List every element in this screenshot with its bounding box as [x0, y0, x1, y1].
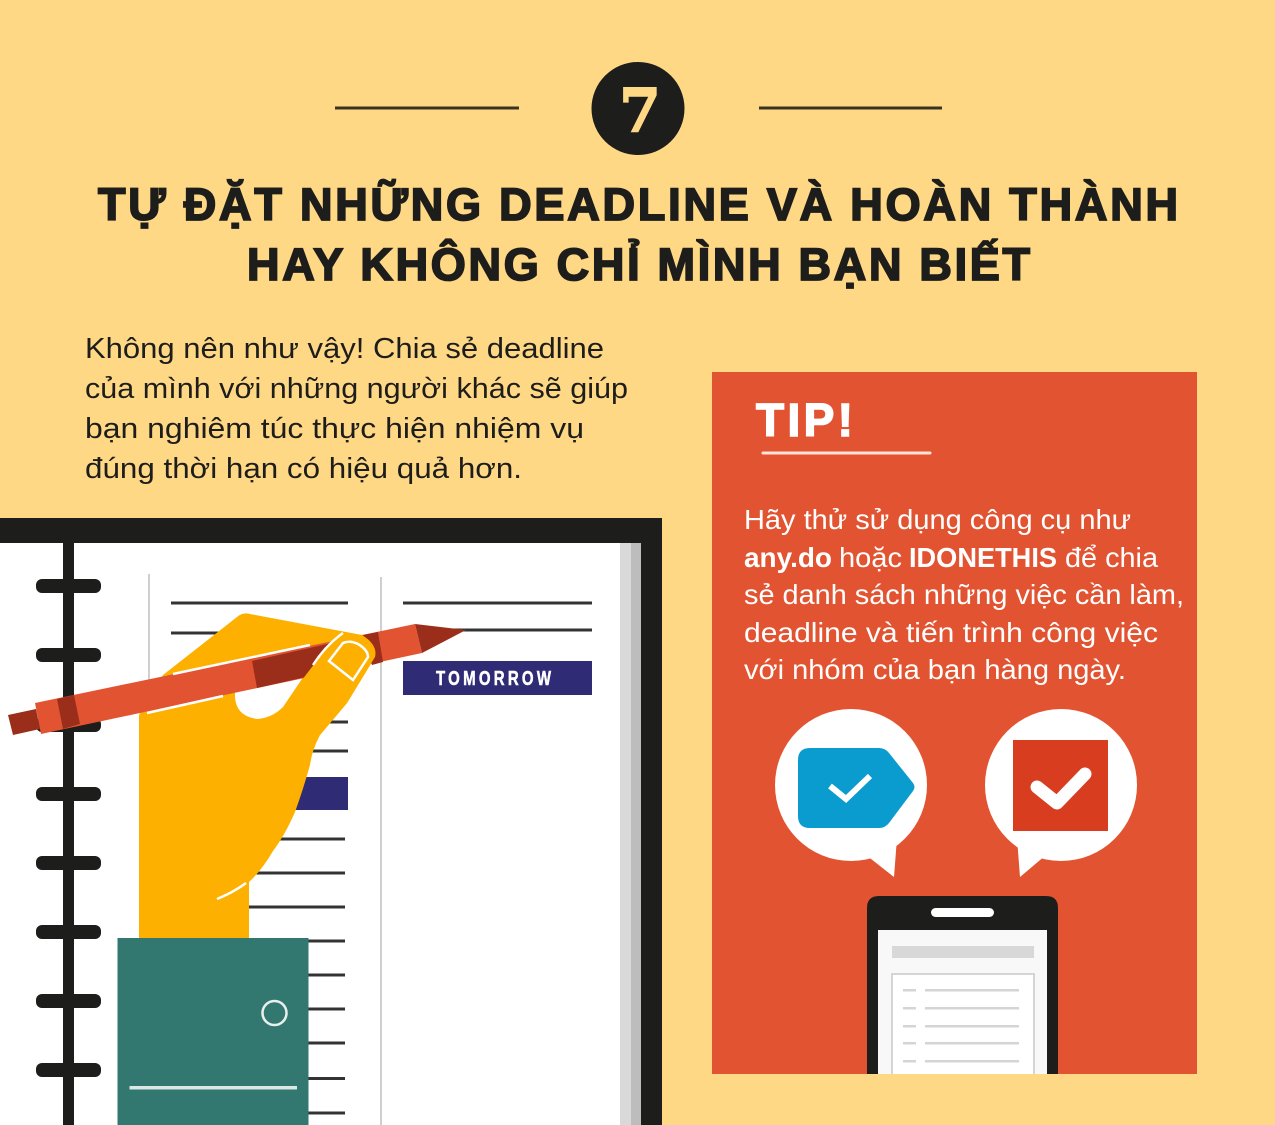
tip heading [756, 394, 932, 454]
panel background [712, 372, 1197, 1074]
title [98, 179, 1178, 290]
hand [139, 613, 375, 938]
number badge with side rules [335, 62, 942, 155]
intro text block: Không nên như vậy! Chia sẻ deadline [85, 333, 604, 365]
tip text: để chia [1065, 542, 1159, 573]
hand crease [217, 883, 246, 899]
intro text block: của mình với những người khác sẽ giúp [85, 373, 628, 405]
shirt cuff [118, 938, 308, 1125]
page column rules and text lines [148, 574, 592, 1125]
icon: smartphone [867, 896, 1058, 1074]
tip text: any.do [744, 542, 832, 573]
gap between fingers [235, 676, 304, 719]
notebook illustration [0, 518, 662, 1125]
tip text [744, 504, 1184, 685]
tip text: deadline và tiến trình công việc [744, 617, 1158, 648]
tip text: với nhóm của bạn hàng ngày. [744, 654, 1126, 685]
intro text block: đúng thời hạn có hiệu quả hơn. [85, 453, 522, 485]
tip panel [712, 372, 1197, 1074]
thumb with nail [295, 633, 375, 735]
tip text: sẻ danh sách những việc cần làm, [744, 579, 1184, 610]
intro text block: bạn nghiêm túc thực hiện nhiệm vụ [85, 413, 584, 445]
pen [8, 624, 466, 735]
tip text: hoặc [839, 542, 902, 573]
tip heading: TIP! [756, 394, 853, 446]
tomorrow label [403, 661, 592, 695]
tip text: IDONETHIS [909, 542, 1057, 573]
notebook page and frame [0, 518, 662, 1125]
number badge with side rules: 7 [619, 76, 661, 146]
spiral binding [36, 543, 101, 1125]
icon: idonethis speech bubble [985, 709, 1137, 877]
icon: any.do speech bubble [775, 709, 927, 877]
tomorrow label: TOMORROW [436, 667, 551, 690]
title: HAY KHÔNG CHỈ MÌNH BẠN BIẾT [247, 239, 1030, 290]
intro text block [85, 333, 628, 485]
title: TỰ ĐẶT NHỮNG DEADLINE VÀ HOÀN THÀNH [98, 179, 1178, 230]
tip text: Hãy thử sử dụng công cụ như [744, 504, 1131, 535]
